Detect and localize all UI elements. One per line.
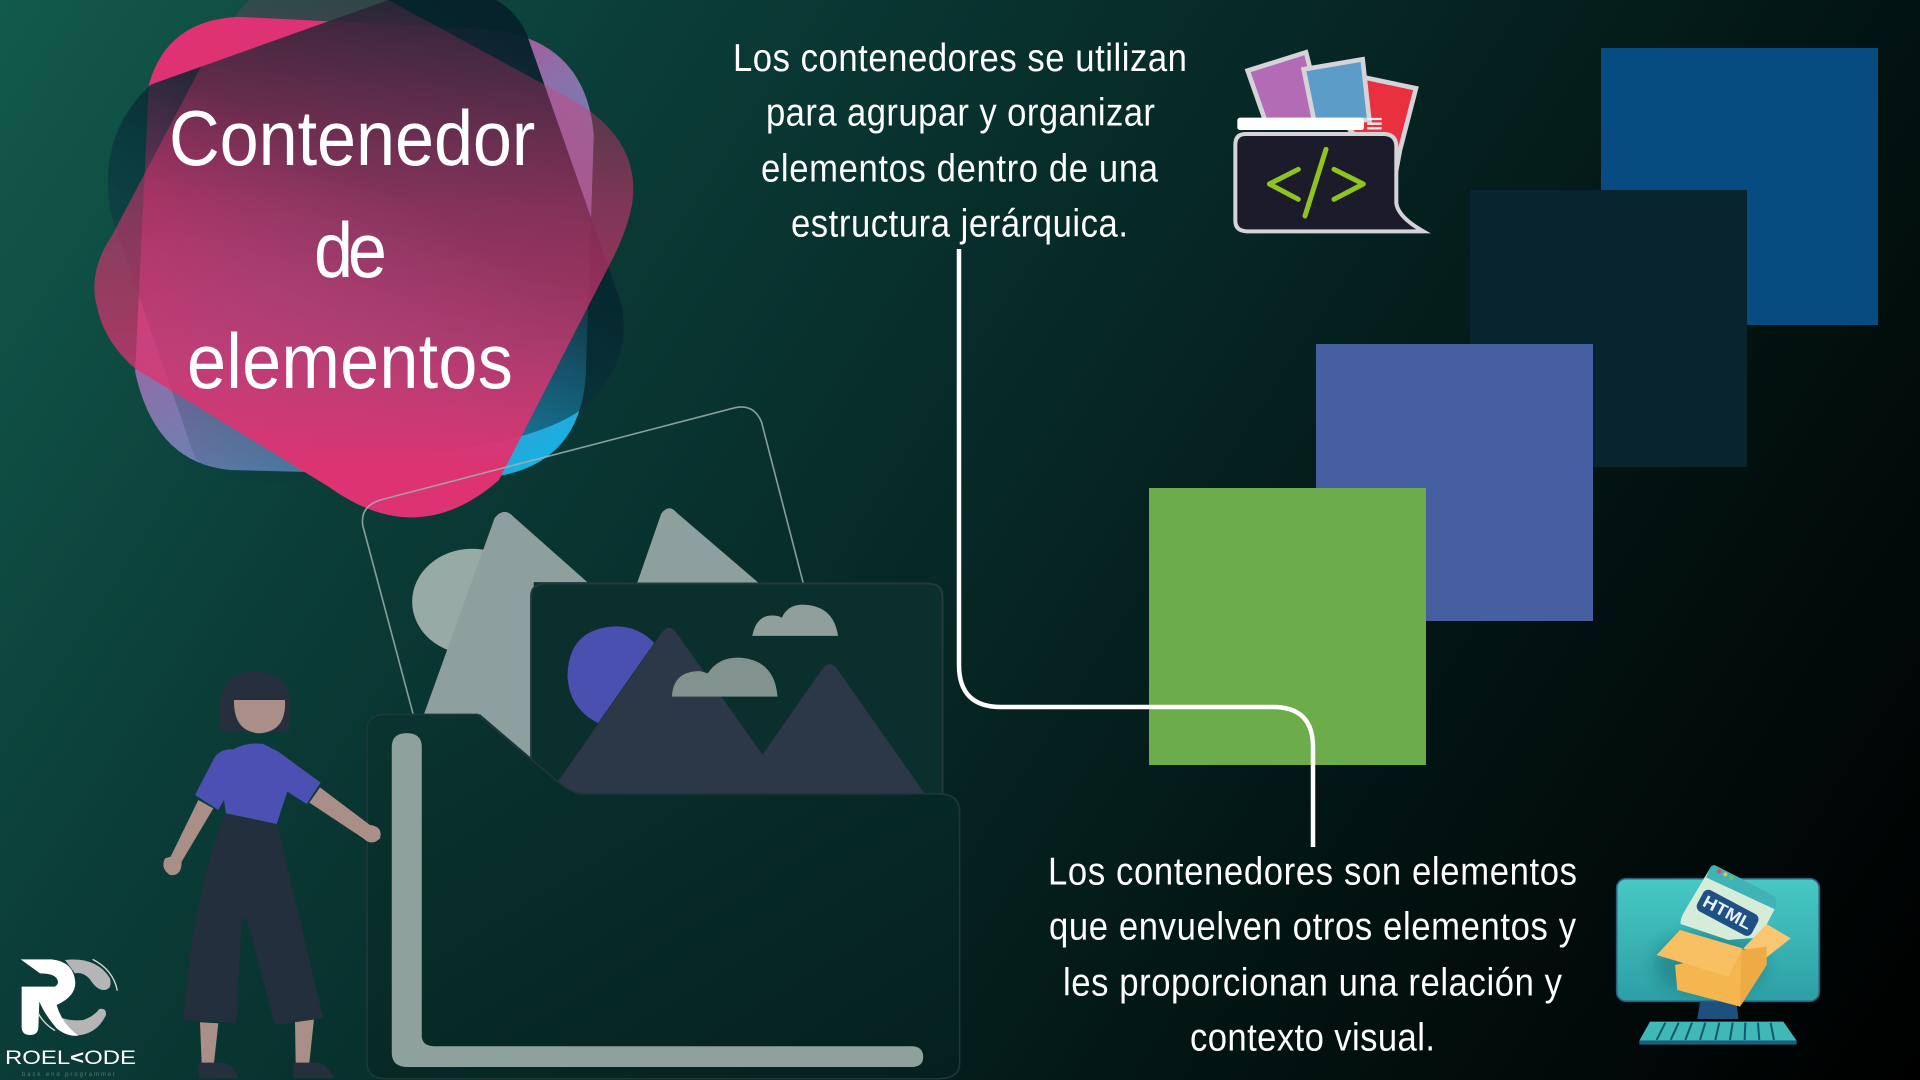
bottom description text: contexto visual. — [1190, 1016, 1435, 1059]
title: elementos — [187, 318, 513, 405]
logo wordmark: ROEL <ODE — [5, 1048, 136, 1069]
icon: html box on monitor: HTML — [1700, 891, 1756, 934]
bottom description text — [1048, 850, 1577, 1059]
bottom description text: que envuelven otros elementos y — [1049, 905, 1577, 948]
bottom description text: Los contenedores son elementos — [1048, 850, 1577, 893]
top description text: estructura jerárquica. — [791, 202, 1128, 245]
top description text — [733, 36, 1187, 245]
title: Contenedor — [169, 95, 535, 182]
top description text: Los contenedores se utilizan — [733, 36, 1187, 79]
title: de — [314, 207, 387, 294]
logo: RoelCode — [5, 959, 136, 1078]
title — [169, 95, 535, 405]
top description text: para agrupar y organizar — [766, 91, 1155, 134]
square: medium blue — [1316, 344, 1593, 621]
top description text: elementos dentro de una — [761, 147, 1159, 190]
square: dark blue — [1601, 48, 1878, 325]
bottom description text: les proporcionan una relación y — [1063, 961, 1563, 1004]
blob shape behind title — [94, 0, 633, 517]
connector line — [959, 249, 1313, 847]
illustration: person — [163, 672, 381, 1078]
icon: code folder — [1235, 52, 1423, 231]
illustration: image folder — [362, 407, 960, 1079]
icon: html box on monitor — [1617, 865, 1819, 1045]
logo mark — [21, 959, 117, 1036]
square: dark navy — [1470, 190, 1747, 467]
logo tagline: back end programmer — [22, 1072, 115, 1078]
square: green — [1149, 488, 1426, 765]
